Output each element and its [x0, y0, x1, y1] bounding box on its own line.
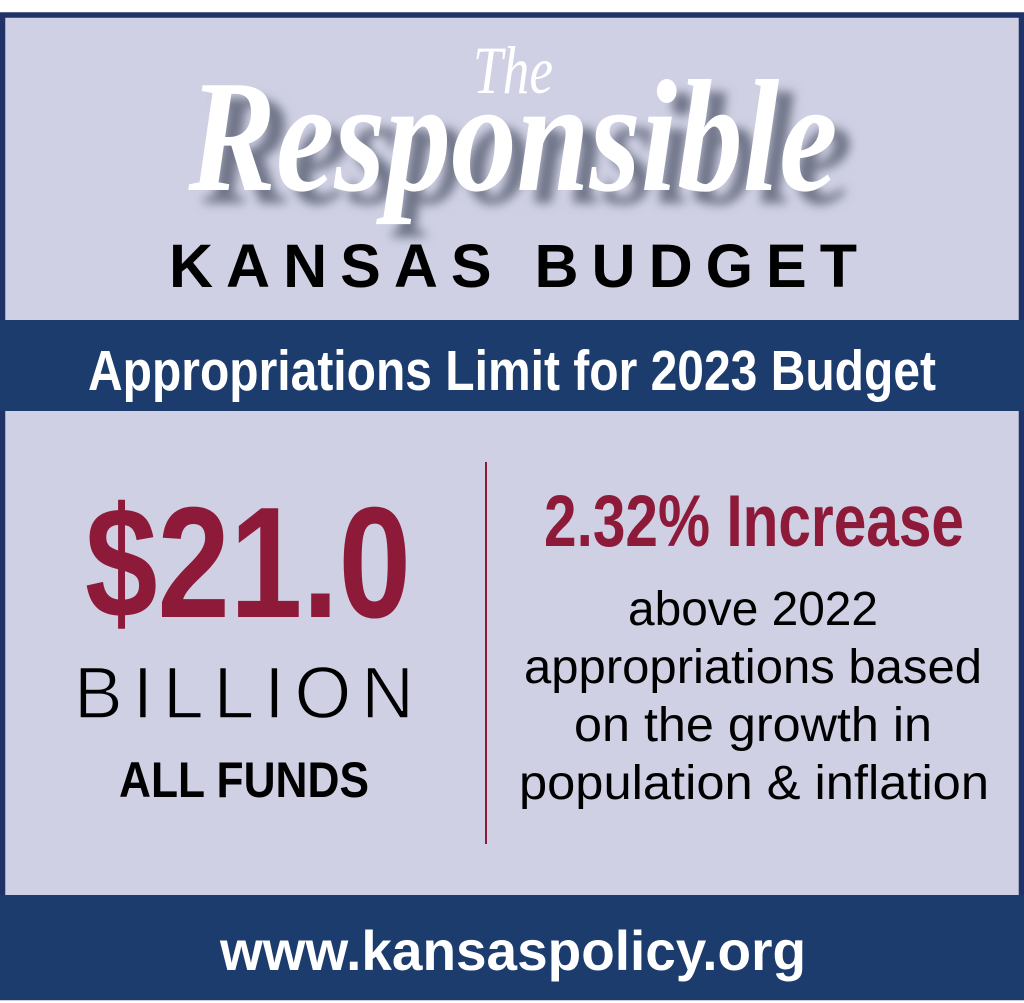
- footer: website: [0, 895, 1024, 1000]
- text block: increase description: [519, 481, 989, 810]
- text block: increase description: population & inflation: [519, 757, 989, 810]
- stat: $21.0 billion all funds: ALL FUNDS: [119, 752, 369, 808]
- text block: increase description: above 2022: [628, 583, 878, 636]
- title: The Responsible: Responsible: [203, 60, 853, 238]
- title: The Responsible: Responsible: [188, 47, 838, 225]
- footer: website: www.kansaspolicy.org: [219, 919, 806, 982]
- stat: $21.0 billion all funds: $21.0: [85, 475, 411, 651]
- stat: $21.0 billion all funds: [74, 475, 414, 808]
- divider line: [485, 462, 487, 844]
- title: The Responsible: The: [473, 32, 553, 108]
- text block: increase description: on the growth in: [574, 699, 932, 752]
- heading: Kansas Budget: KANSAS BUDGET: [169, 232, 857, 300]
- stat: $21.0 billion all funds: BILLION: [74, 653, 414, 734]
- text block: increase description: appropriations based: [524, 641, 982, 694]
- banner: appropriations limit: [0, 320, 1024, 411]
